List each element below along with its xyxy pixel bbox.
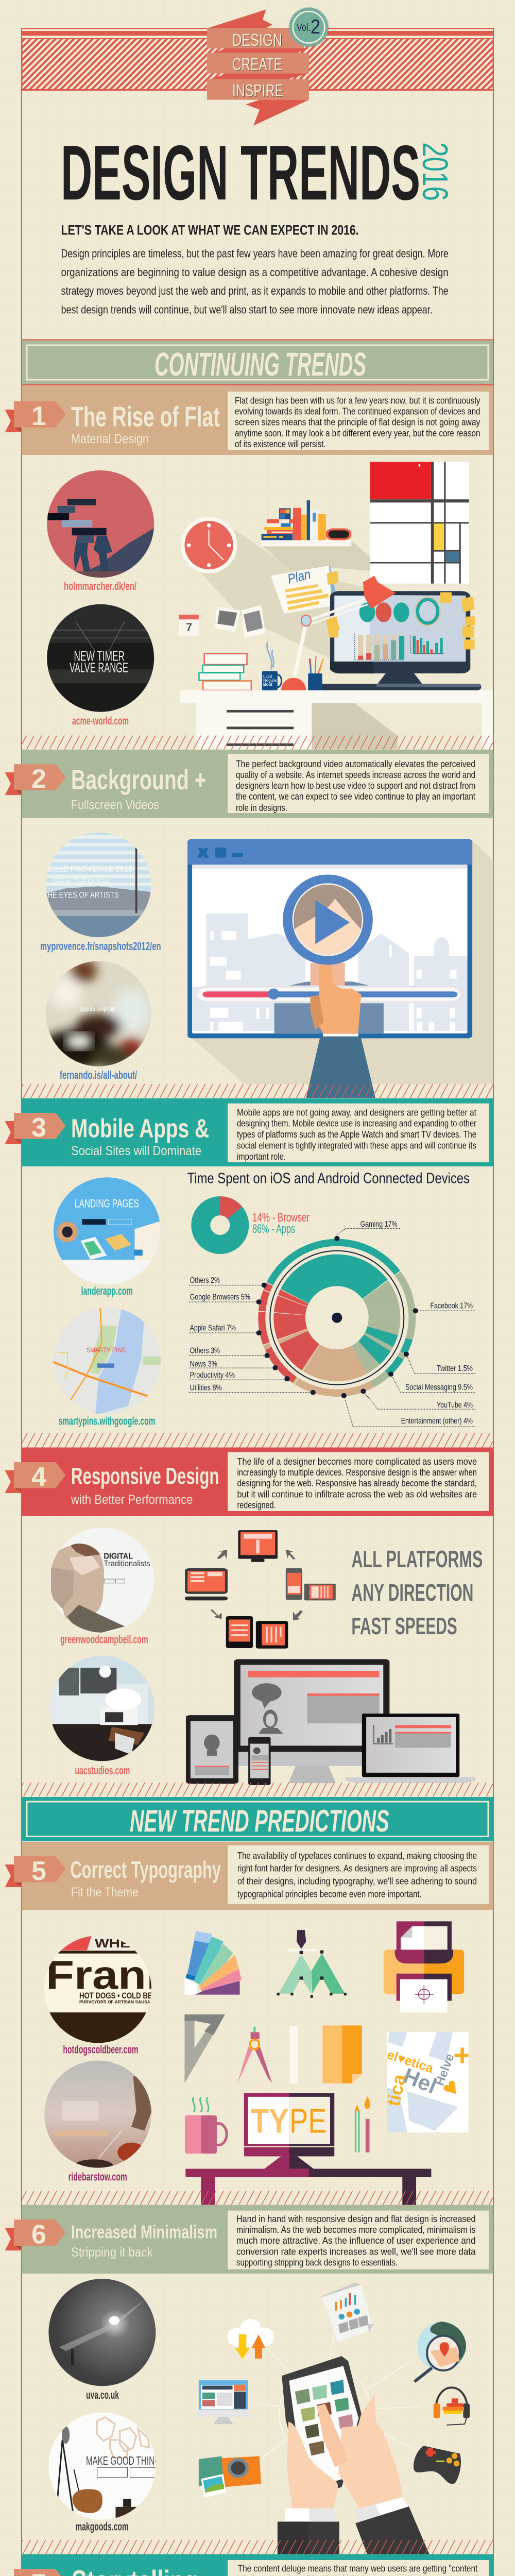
url ridebarstow: ridebarstow.com xyxy=(68,2170,127,2183)
section 2 header: role in designs. xyxy=(236,803,287,813)
plan note lettering: Plan xyxy=(286,566,312,587)
map headline: SMARTY PINS xyxy=(87,1346,126,1354)
section 1 header: Material Design xyxy=(71,432,149,446)
section 4 header: with Better Performance xyxy=(71,1493,193,1507)
section 2 header: The perfect background video automatically elevates the perceived xyxy=(236,759,475,769)
banner: new trend predictions xyxy=(22,1797,493,1841)
section 5 header: Fit the Theme xyxy=(71,1885,139,1900)
video slider xyxy=(195,986,463,1003)
map globe xyxy=(415,2321,466,2382)
coffee mug xyxy=(185,2097,227,2154)
chart labels: Twitter 1.5% xyxy=(437,1364,473,1373)
site sample: uacstudios xyxy=(49,1656,158,1762)
mug lettering xyxy=(263,674,278,687)
site sample: ridebarstow xyxy=(44,2060,152,2173)
mug lettering: Bold xyxy=(263,682,272,687)
section 2 header: the content, we can expect to see video continue to play an important xyxy=(236,791,475,802)
hotdog lettering xyxy=(49,1939,151,2003)
section 1 header: The Rise of Flat xyxy=(71,401,220,433)
number ribbon 5: 5 xyxy=(31,1856,46,1886)
hatch divider 1 xyxy=(22,736,493,750)
intro heading: LET'S TAKE A LOOK AT WHAT WE CAN EXPECT IN 2016. xyxy=(61,222,359,238)
section 1 header: of its existence will persist. xyxy=(235,439,326,449)
section 6 header: Hand in hand with responsive design and flat design is increased xyxy=(236,2214,476,2224)
section 2 header: designers learn how to best use video to support and not distract from xyxy=(236,781,475,791)
number ribbon 6: 6 xyxy=(31,2219,46,2249)
site sample: smartypins map xyxy=(53,1308,163,1415)
section 6 header: Increased Minimalism xyxy=(71,2222,217,2243)
section 3 header: important role. xyxy=(237,1151,286,1162)
section 2 illustration: video player xyxy=(187,839,493,1098)
section 1 illustration: flat design desk xyxy=(179,462,493,749)
left hand xyxy=(278,2422,339,2554)
hotdog lettering: WHEN xyxy=(95,1937,141,1951)
type lettering: PE xyxy=(289,2102,327,2141)
drafting compass xyxy=(237,2027,272,2083)
section 2 header: Background + xyxy=(71,765,206,795)
section 6 header: much more attractive. As the influence of user experience and xyxy=(236,2235,476,2246)
site sample: hotdogscoldbeer xyxy=(43,1935,154,2044)
chart labels: Utilities 8% xyxy=(190,1384,222,1392)
intro paragraph xyxy=(61,247,449,316)
section 6 header: minimalism. As the web becomes more complicated, minimalism is xyxy=(236,2225,476,2235)
platform slogans: FAST SPEEDS xyxy=(351,1613,457,1639)
section 6 header: Stripping it back xyxy=(71,2245,153,2260)
hatch divider 5 xyxy=(22,2191,493,2205)
right hand xyxy=(317,2394,430,2554)
greenwood headline: Traditionalists xyxy=(104,1560,150,1568)
phone xyxy=(248,1737,271,1785)
ribbon: design create inspire: INSPIRE xyxy=(232,81,283,100)
small donut chart: browser vs apps xyxy=(201,1206,310,1245)
number ribbon 4: 4 xyxy=(31,1462,46,1492)
url uva: uva.co.uk xyxy=(86,2388,119,2401)
number ribbon 3 xyxy=(5,1113,66,1144)
hotdog lettering: HOT DOGS • COLD BEER xyxy=(79,1991,162,2001)
acme-world headline: NEW TIMER xyxy=(74,648,125,664)
number ribbon 2 xyxy=(5,764,66,795)
provence headline: HE EYES OF ARTISTS xyxy=(47,890,118,900)
intro paragraph: best design trends will continue, but we'll also start to see more innovate new ideas appear. xyxy=(61,303,433,316)
helvetica lettering: tica xyxy=(383,2072,410,2108)
section 2 header: quality of a website. As internet speeds increase across the world and xyxy=(236,770,475,780)
url makgoods: makgoods.com xyxy=(76,2520,128,2533)
pen tool xyxy=(277,1930,347,1998)
section 2 header xyxy=(5,750,493,818)
section 6 header: conversion rate experts increases as well, we'll see more data xyxy=(236,2246,476,2257)
type lettering: TY xyxy=(251,2102,289,2141)
site sample: acme-world xyxy=(46,603,158,712)
hotdog lettering: Frank xyxy=(46,1952,173,1997)
provence headline: EILLE PROVENCE 2013 xyxy=(47,864,133,874)
url acme-world: acme-world.com xyxy=(72,715,129,727)
donut legend: 86% - Apps xyxy=(252,1222,295,1236)
responsive devices illustration xyxy=(186,1659,476,1785)
chart labels: Facebook 17% xyxy=(431,1302,473,1311)
url greenwoodcampbell: greenwoodcampbell.com xyxy=(60,1633,148,1646)
camera icon xyxy=(199,2456,261,2498)
helvetica poster xyxy=(387,2032,468,2132)
section 6 header xyxy=(5,2205,493,2274)
multi-device cycle icons xyxy=(185,1530,336,1649)
acme-world headline xyxy=(70,648,128,675)
number ribbon 5 xyxy=(5,1856,66,1887)
section 4 header: designing for the web. Responsive has already become the standard, xyxy=(237,1478,477,1488)
chart labels: Others 2% xyxy=(190,1276,220,1285)
site sample: fernando xyxy=(40,959,151,1070)
phone in hand xyxy=(282,2356,363,2495)
hand and sleeve xyxy=(306,965,375,1098)
helvetica lettering: + xyxy=(453,2038,471,2073)
badge: vol 2: Vol. xyxy=(297,22,311,33)
banner: continuing trends: CONTINUING TRENDS xyxy=(154,346,366,383)
window frame xyxy=(187,839,472,1038)
section 3 header: Social Sites will Dominate xyxy=(71,1144,201,1158)
helvetica lettering: Hel xyxy=(400,2063,440,2098)
ribbon: design create inspire: DESIGN xyxy=(232,30,282,49)
section 4 header: redesigned. xyxy=(237,1500,276,1510)
url uacstudios: uacstudios.com xyxy=(75,1764,130,1777)
site sample: myprovence xyxy=(43,833,154,940)
section 5 header: typographical principles become even more important. xyxy=(237,1889,422,1899)
city backdrop xyxy=(192,913,468,1031)
section 1 header: screen sizes means that the principle of flat design is not going away xyxy=(235,417,480,427)
provence headline: SEEN THROUGH xyxy=(52,877,109,887)
sticky notes xyxy=(326,592,475,649)
helvetica lettering: el♥etica xyxy=(385,2047,436,2076)
typography tools illustration xyxy=(184,1921,468,2156)
site sample: landerapp xyxy=(53,1176,164,1284)
desktop icon xyxy=(197,2380,250,2424)
helvetica lettering: Helve xyxy=(433,2052,457,2088)
chart labels: News 3% xyxy=(190,1360,217,1369)
monitor with charts xyxy=(319,591,481,690)
hatch divider 2 xyxy=(22,1084,493,1098)
number ribbon 1 xyxy=(5,401,66,432)
report document xyxy=(321,2282,374,2342)
hatch divider 6 xyxy=(22,2540,493,2554)
badge: vol 2: 2 xyxy=(311,16,320,38)
folded note xyxy=(322,2025,362,2083)
header banner stripes xyxy=(22,28,493,91)
plan note xyxy=(271,565,338,614)
connector lines xyxy=(253,2335,420,2458)
number ribbon 1: 1 xyxy=(31,401,46,431)
donut legend: 14% - Browser xyxy=(252,1211,310,1225)
section 5 header: Correct Typography xyxy=(70,1856,221,1883)
chart labels: Social Messaging 9.5% xyxy=(405,1383,473,1392)
chart labels: Productivity 4% xyxy=(190,1371,235,1380)
makgoods headline: MAKE GOOD THINGS xyxy=(86,2454,166,2467)
section 3 header xyxy=(5,1098,493,1166)
chart labels: Others 3% xyxy=(190,1347,220,1355)
inner ring xyxy=(270,1250,404,1385)
section 1 header: Flat design has been with us for a few years now, but it is continuously xyxy=(235,396,480,406)
calendar digit: 7 xyxy=(186,621,192,634)
hotdog lettering: PURVEYORS OF ARTISAN SAUSAGE xyxy=(79,2000,157,2004)
hatch divider 4 xyxy=(22,1783,493,1797)
type lettering xyxy=(251,2102,327,2141)
url holmmarcher: holmmarcher.dk/en/ xyxy=(64,580,136,592)
ribbon: design create inspire: CREATE xyxy=(232,55,282,74)
minimal phone illustration xyxy=(197,2282,470,2495)
chart labels: Google Browsers 5% xyxy=(190,1293,250,1301)
provence headline xyxy=(47,864,133,900)
site sample: holmmarcher xyxy=(47,470,154,578)
mug lettering: Light xyxy=(263,674,272,679)
section 6 header: supporting stripping back designs to essentials. xyxy=(236,2258,398,2268)
section 5 header xyxy=(5,1842,493,1910)
chart labels: Gaming 17% xyxy=(360,1220,398,1229)
section 5 header: of their designs, including typography, we'll see adhering to sound xyxy=(237,1876,477,1886)
lander headline: LANDING PAGES xyxy=(75,1197,139,1210)
platform slogans xyxy=(351,1546,483,1639)
type monitor xyxy=(244,2093,334,2156)
badge: vol 2 xyxy=(289,8,328,46)
donut legend xyxy=(252,1211,310,1236)
section 7 header xyxy=(5,2554,493,2576)
wall clock xyxy=(181,517,237,573)
section 4 header: but it will continue to infiltrate across the web as old websites are xyxy=(237,1489,477,1499)
acme-world headline: VALVE RANGE xyxy=(70,660,128,675)
ruler xyxy=(290,2026,298,2083)
url fernando: fernando.is/all-about/ xyxy=(60,1069,137,1081)
number ribbon 3: 3 xyxy=(31,1113,46,1143)
section 1 header xyxy=(5,386,493,455)
white desk xyxy=(180,690,493,749)
helvetica lettering xyxy=(387,2047,469,2105)
chart labels xyxy=(190,1220,473,1426)
desk lamp xyxy=(281,575,396,690)
laptop xyxy=(346,1714,476,1783)
ribbon: design create inspire xyxy=(207,9,309,126)
helvetica lettering: ♥ xyxy=(436,2072,466,2104)
banner: continuing trends xyxy=(22,339,493,385)
number ribbon 2: 2 xyxy=(31,764,46,794)
section 2 header: Fullscreen Videos xyxy=(71,798,159,812)
number ribbon 6 xyxy=(5,2219,66,2250)
greenwood headline: DIGITAL xyxy=(104,1552,133,1561)
big donut chart: time spent xyxy=(231,1211,443,1424)
desktop xyxy=(234,1659,389,1783)
desk with monitor stand xyxy=(185,2156,431,2205)
section 4 header: The life of a designer becomes more complicated as users move xyxy=(237,1456,477,1467)
site sample: uva xyxy=(48,2279,156,2386)
section 5 header: right font harder for designers. As designers are improving all aspects xyxy=(237,1863,477,1873)
book stack, mug and pens xyxy=(199,642,323,690)
section 3 header: Mobile Apps & xyxy=(71,1114,209,1143)
person xyxy=(274,874,384,1034)
section 4 header xyxy=(5,1448,493,1516)
chart labels: Entertainment (other) 4% xyxy=(401,1417,473,1426)
section 4 header: Responsive Design xyxy=(71,1463,219,1489)
hands and camera xyxy=(199,2394,430,2554)
mondrian poster xyxy=(370,462,469,584)
bookshelf xyxy=(262,500,351,546)
url landerapp: landerapp.com xyxy=(81,1284,133,1297)
section 7 header: The content deluge means that many web users are getting "content xyxy=(238,2563,477,2573)
url myprovence: myprovence.fr/snapshots2012/en xyxy=(40,940,161,953)
tablet xyxy=(186,1715,238,1784)
section 3 header: Mobile apps are not going away, and designers are getting better at xyxy=(237,1108,476,1118)
swatch fan xyxy=(184,1931,242,1995)
mug lettering: Regular xyxy=(263,678,278,683)
chart leader lines and dots xyxy=(189,1229,475,1427)
calendar and photos xyxy=(179,605,265,638)
site sample: makgoods xyxy=(48,2413,157,2521)
url smartypins: smartypins.withgoogle.com xyxy=(59,1415,156,1427)
cloud sync icon xyxy=(227,2319,274,2359)
number ribbon 4 xyxy=(5,1462,66,1493)
headphones xyxy=(434,2387,470,2425)
fernando headline: Superb simplicity xyxy=(80,1005,116,1013)
site sample: greenwoodcampbell xyxy=(50,1528,154,1634)
outer ring xyxy=(231,1211,443,1424)
url hotdogscoldbeer: hotdogscoldbeer.com xyxy=(63,2043,138,2056)
game controller xyxy=(414,2446,461,2484)
greenwood headline xyxy=(104,1552,150,1568)
hatch divider 3 xyxy=(22,1433,493,1448)
title year 2016: 2016 xyxy=(415,142,455,201)
printer xyxy=(384,1921,464,2012)
set square xyxy=(184,2014,225,2083)
chart labels: YouTube 4% xyxy=(437,1401,473,1410)
pencil and brush xyxy=(355,2096,370,2153)
intro paragraph: organizations are beginning to value design as a competitive advantage. A cohesive design xyxy=(61,266,449,279)
chart labels: Apple Safari 7% xyxy=(190,1324,236,1332)
number ribbon 7 xyxy=(5,2569,66,2576)
